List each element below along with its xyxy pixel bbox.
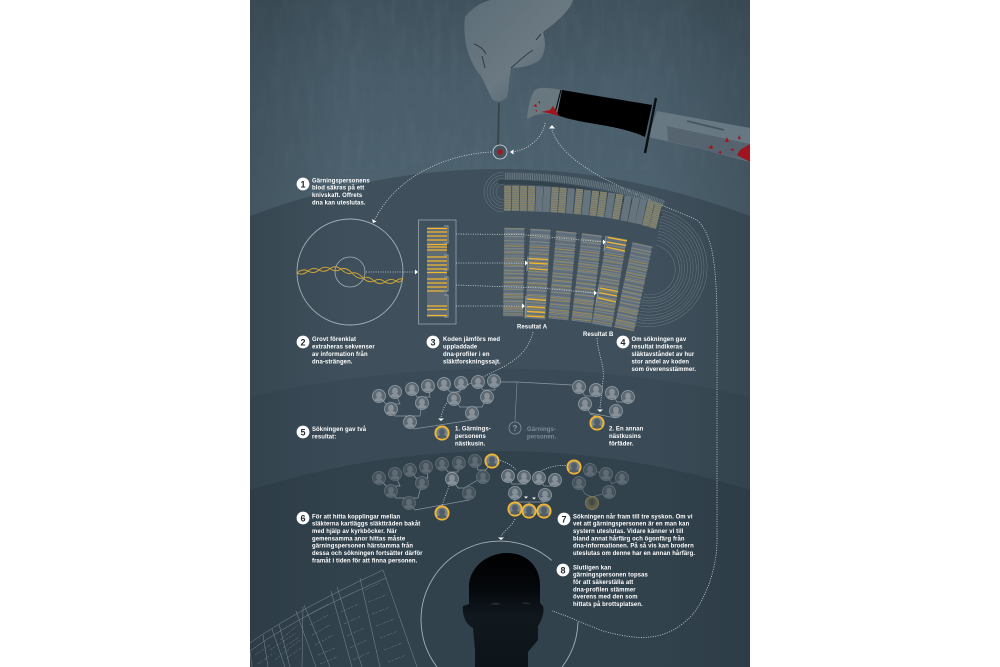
person: common ancestor: [485, 454, 499, 468]
result 2 text: förfäder.: [609, 442, 634, 448]
step 3 text: släktforskningssajt.: [443, 360, 501, 366]
step 7 text: bland annat hårfärg och ögonfärg från: [573, 535, 685, 542]
step 7 text: uteslutas om denne har en annan hårfärg.: [573, 550, 695, 557]
step 8 text: [557, 564, 648, 608]
dark slot: [500, 182, 660, 214]
background panel: [250, 0, 750, 667]
step 6 text: framåt i tiden för att finna personen.: [312, 557, 418, 564]
step 4 text: Om sökningen gav: [632, 337, 687, 343]
step 6 text: [297, 512, 423, 564]
illustration: bloody knife: [527, 88, 750, 162]
extracted code box: [418, 220, 456, 324]
arrow: knife to swab: [510, 123, 545, 154]
family tree: ancestors left: [372, 454, 499, 520]
person: second cousin: [435, 426, 449, 440]
step 4 text: [617, 336, 696, 373]
label: Resultat A: Resultat A: [517, 324, 548, 330]
step 7 text: vet att gärningspersonen är en man kan: [573, 522, 690, 528]
unknown perpetrator: ?: [512, 424, 518, 433]
step 4 text: stor andel av koden: [632, 360, 689, 366]
step 2 text: av information från: [312, 351, 368, 358]
icon: blood sample: [493, 145, 507, 159]
dna circle: [297, 219, 403, 325]
step 8 text: gärningspersonen topsas: [573, 573, 648, 579]
badge 8: 8: [560, 565, 566, 575]
step 8 text: dna-profilen stämmer: [573, 587, 636, 593]
arrows: code to database matches: [456, 234, 606, 308]
unknown perpetrator: personen.: [527, 434, 557, 440]
person: faded sibling branch: [586, 496, 598, 510]
step 7 text: systern uteslutas. Vidare känner vi till: [573, 529, 684, 535]
badge 3: 3: [430, 337, 436, 347]
person: other second cousin: [590, 416, 604, 430]
unknown perpetrator: Gärnings-: [527, 427, 556, 433]
badge 4: 4: [620, 337, 626, 347]
step 2 text: dna-strängen.: [312, 360, 353, 366]
step 5 text: Sökningen gav två: [312, 426, 367, 433]
arrow: siblings to suspect: [498, 519, 515, 540]
step 6 text: med hjälp av kyrkböcker. När: [312, 529, 398, 535]
step 1 text: knivskaft. Offrets: [312, 193, 363, 199]
family tree: result A: [372, 374, 572, 440]
family tree: three siblings: [498, 460, 628, 518]
main profile columns: [513, 228, 643, 329]
step 5 text: [297, 426, 367, 440]
step 2 text: [297, 336, 375, 366]
step 8 text: Slutligen kan: [573, 565, 612, 571]
step 8 text: för att säkerställa att: [573, 580, 633, 586]
arrow: long return path from suspect to knife: [549, 125, 717, 637]
step 2 text: Grovt förenklat: [312, 337, 356, 343]
step 6 text: gärningspersonen härstamma från: [312, 543, 413, 550]
step 4 text: som överensstämmer.: [632, 367, 696, 373]
family tree: result B: [572, 380, 634, 430]
step 1 text: Gärningspersonens: [312, 178, 370, 184]
step 1 text: [297, 178, 370, 206]
illustration: church record ledger: [250, 570, 417, 667]
curved strip: [505, 176, 664, 204]
step 7 text: Sökningen når fram till tre syskon. Om vi: [573, 513, 693, 520]
badge 1: 1: [300, 179, 306, 189]
step 7 text: [558, 513, 695, 557]
step 6 text: dessa och sökningen fortsätter därför: [312, 551, 423, 557]
step 7 text: dna-informationen. På så vis kan brodern: [573, 543, 694, 550]
step 3 text: dna-profiler i en: [443, 352, 490, 358]
step 4 text: släktavståndet av hur: [632, 351, 695, 358]
badge 6: 6: [300, 513, 306, 523]
persons: three siblings: [508, 502, 551, 518]
illustration: suspect portrait: [463, 553, 544, 667]
step 3 text: [427, 336, 501, 366]
dna strand: [297, 267, 403, 284]
result 1 text: personens: [455, 434, 487, 440]
illustration: gloved hand with swab: [464, 0, 573, 146]
arrows: to siblings: [524, 496, 536, 500]
step 1 text: dna kan uteslutas.: [312, 200, 366, 206]
suspect circle: [421, 541, 578, 667]
result 1 text: 1. Gärnings-: [455, 426, 491, 432]
arrow: sample to dna circle: [372, 152, 491, 223]
yellow sequence bars: [427, 228, 447, 316]
result 1 text: nästkusin.: [455, 442, 486, 448]
result 2 text: 2. En annan: [609, 426, 644, 432]
step 1 text: blod säkras på ett: [312, 185, 364, 192]
step 4 text: resultat indikeras: [632, 344, 683, 350]
person: ancestor right: [567, 460, 581, 474]
arrows: results to family trees: [438, 332, 603, 421]
step 6 text: släkterna kartläggs släktträden bakåt: [312, 521, 420, 528]
result 2 text: nästkusins: [609, 434, 642, 440]
person: descendant: [435, 506, 449, 520]
database fan graphic: [484, 172, 707, 329]
step 2 text: extraheras sekvenser: [312, 344, 375, 350]
step 3 text: Koden jämförs med: [443, 337, 500, 343]
result 1 text: [455, 426, 491, 448]
label: Resultat B: Resultat B: [583, 332, 614, 338]
step 8 text: överens med den som: [573, 595, 638, 601]
upper stored profiles: [508, 186, 659, 228]
arrow: dna to code: [366, 270, 418, 274]
step 6 text: För att hitta kopplingar mellan: [312, 514, 400, 520]
badge 5: 5: [300, 427, 306, 437]
badge 2: 2: [300, 337, 306, 347]
badge 7: 7: [561, 514, 567, 524]
step 5 text: resultat:: [312, 434, 336, 440]
fan contour lines: [484, 172, 707, 327]
unknown perpetrator: [509, 382, 557, 440]
matching segments: [526, 238, 627, 317]
step 6 text: gemensamma anor hittas måste: [312, 535, 406, 542]
step 8 text: hittats på brottsplatsen.: [573, 601, 643, 608]
step 3 text: uppladdade: [443, 344, 478, 350]
result 2 text: [609, 426, 644, 448]
